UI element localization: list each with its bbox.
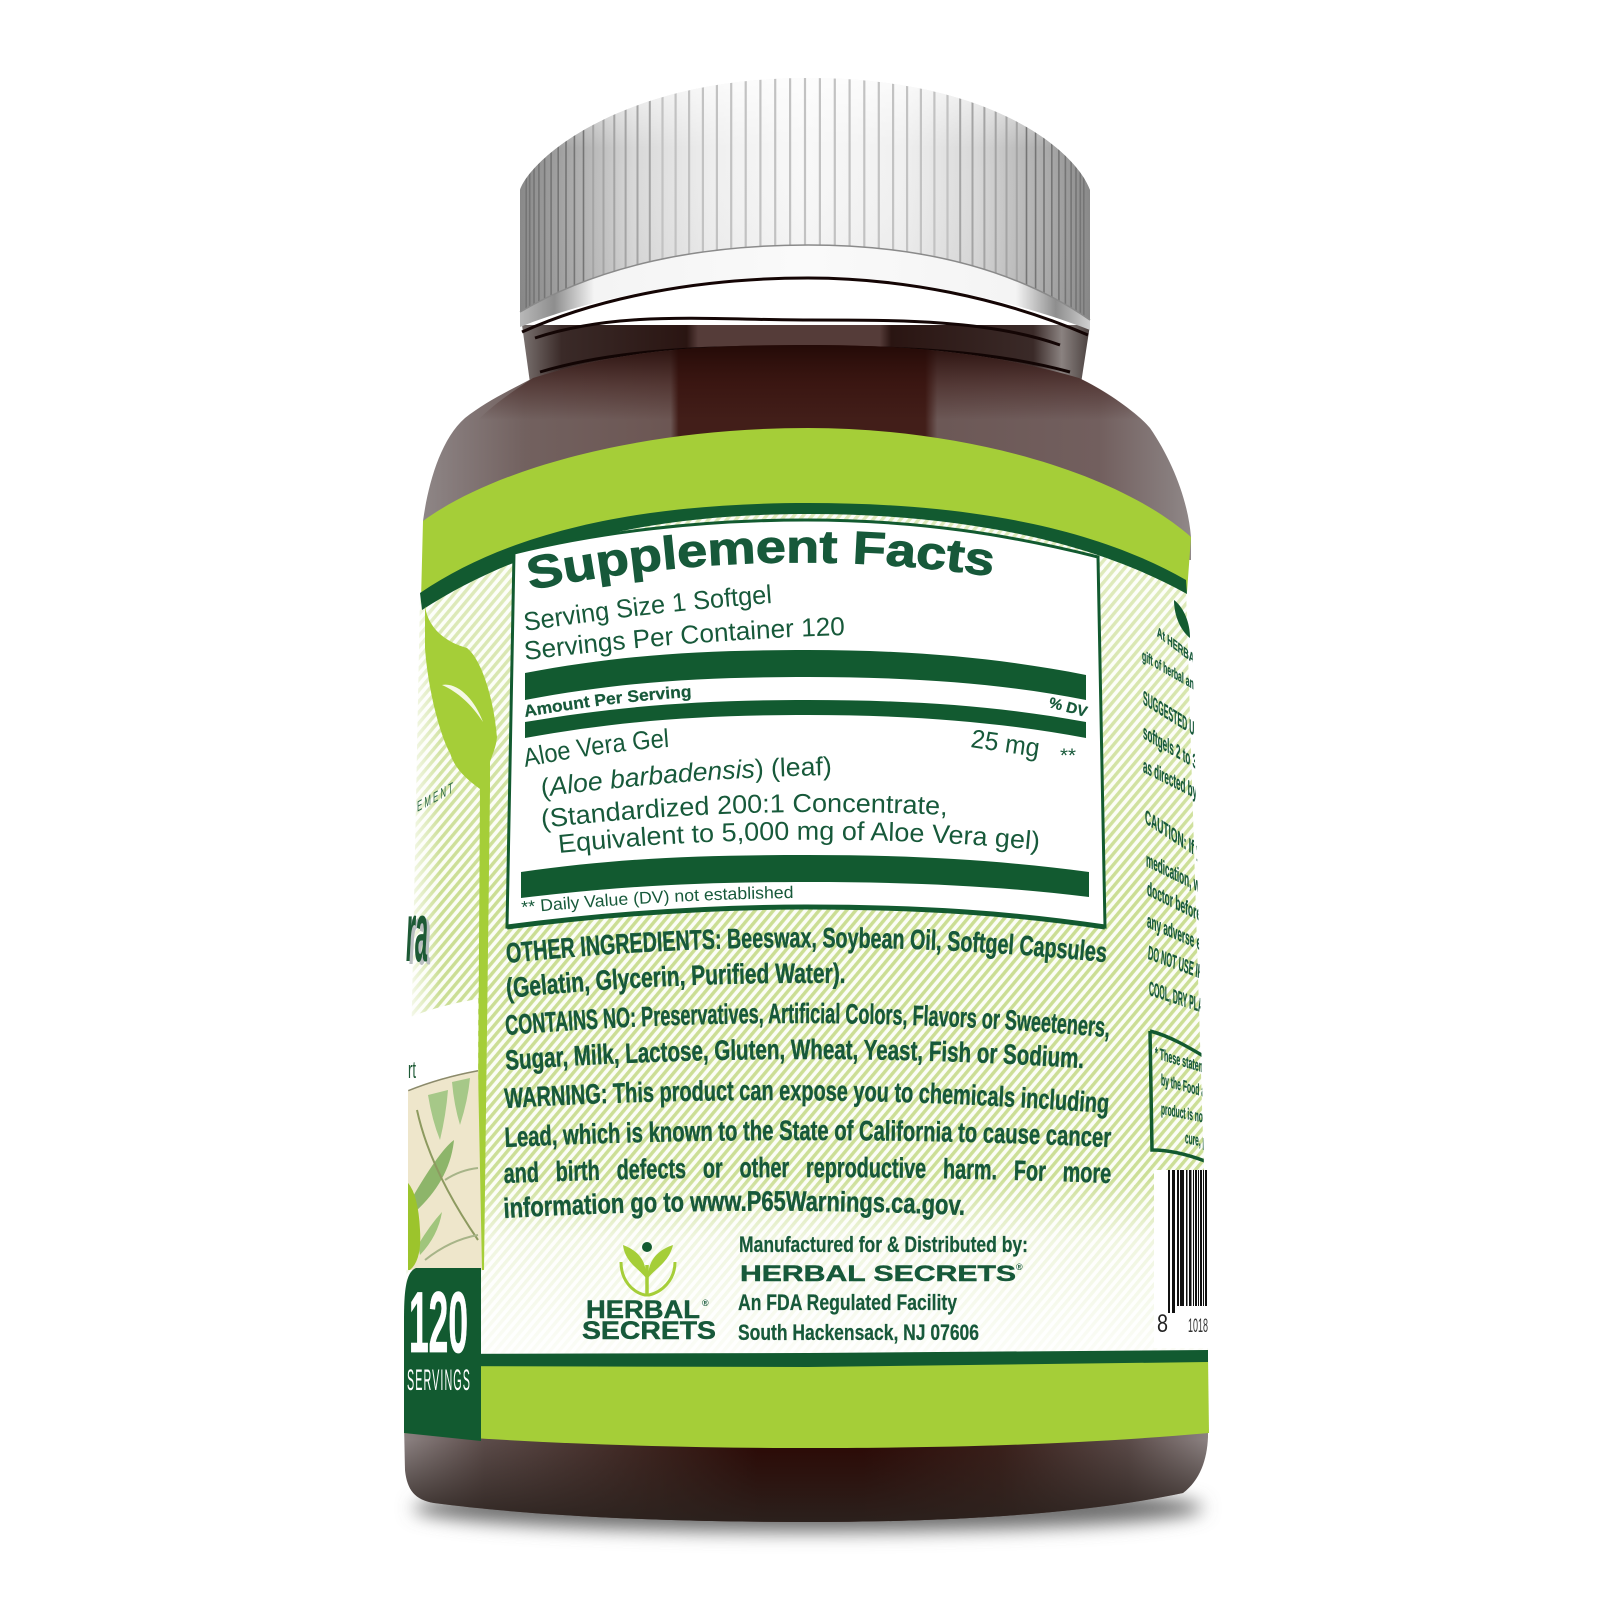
facility: An FDA Regulated Facility [738, 1290, 958, 1315]
lime bottom band [404, 1356, 1209, 1448]
bottle base [404, 1425, 1208, 1522]
text: CAUTION: If y [1145, 805, 1201, 864]
ingredient daily value: ** [1060, 746, 1077, 767]
ground shadow [413, 1484, 1203, 1532]
text: any adverse e [1147, 910, 1201, 955]
company name: HERBAL SECRETS [740, 1261, 1016, 1286]
front label fragment: ra [406, 885, 428, 979]
company name: ® [1016, 1262, 1023, 1272]
panel: supplement facts [505, 518, 1107, 930]
footnote: ** Daily Value (DV) not established [522, 886, 792, 912]
front label fragment: ra [409, 888, 431, 982]
label [400, 428, 1209, 1448]
text: SUGGESTED US [1143, 686, 1199, 743]
barcode digits [1157, 1310, 1208, 1338]
barcode [1154, 1170, 1208, 1348]
botanical photo [405, 1065, 485, 1270]
icon: small leaf [1174, 600, 1190, 638]
bottle neck [522, 318, 1090, 390]
other ingredients: (Gelatin, Glycerin, Purified Water). [507, 962, 844, 1004]
ingredient name: Aloe Vera Gel [525, 728, 668, 767]
top dark green arc [420, 503, 1187, 610]
text: cure, pr [1185, 1129, 1209, 1152]
strip text fragment: rt [408, 1057, 416, 1084]
standardization: (Standardized 200:1 Concentrate, [542, 794, 946, 833]
prop 65 warning: information go to www.P65Warnings.ca.gov. [504, 1190, 964, 1220]
right side wrapped text [1142, 600, 1210, 1163]
sprout leaf and stem [425, 606, 497, 1270]
logo wordmark: ® [702, 1298, 709, 1308]
other ingredients: OTHER INGREDIENTS: Beeswax, Soybean Oil, Softgel Capsules [506, 927, 1106, 963]
front label fragment: SERVINGS [407, 1364, 471, 1397]
text: doctor before [1147, 878, 1201, 926]
intro text [1142, 628, 1194, 690]
product name fragment [406, 916, 430, 965]
front label fragment [404, 606, 497, 1441]
text: 1018 [1188, 1316, 1208, 1337]
leaf highlight [442, 685, 483, 722]
front label fragment: 120 [409, 1275, 468, 1371]
caution [1145, 805, 1203, 1018]
contains no [506, 1002, 1109, 1074]
label hatched background [405, 510, 1208, 1354]
right side wrapped text: gift of herbal and [1142, 647, 1198, 696]
facts title: Supplement Facts [528, 531, 993, 588]
prop 65 warning: WARNING: This product can expose you to chemicals including [504, 1080, 1108, 1119]
white name strip [408, 999, 478, 1090]
icon: herbal secrets logo [621, 1242, 675, 1295]
footer: brand [582, 1232, 1028, 1345]
disclaimer box [1150, 1031, 1210, 1163]
serving size: Serving Size 1 Softgel [524, 584, 771, 630]
text: softgels 2 to 3 [1143, 719, 1197, 774]
intro text: At HERBAL [1157, 625, 1199, 671]
servings per container: Servings Per Container 120 [526, 617, 844, 660]
text: medication, w [1146, 849, 1200, 897]
product subtitle fragment: EMENT [417, 778, 455, 816]
thick rule 3 [521, 855, 1089, 898]
text: DO NOT USE IF [1148, 942, 1202, 984]
thick rule 2 [525, 700, 1086, 738]
percent daily value header: % DV [1050, 697, 1088, 716]
cap knurled ribs [515, 70, 1095, 330]
prop 65 warning: Lead, which is known to the State of California to cause cancer [505, 1120, 1112, 1150]
text: COOL, DRY PLA [1149, 977, 1203, 1018]
contains no: Sugar, Milk, Lactose, Gluten, Wheat, Yeast, Fish or Sodium. [506, 1038, 1083, 1074]
ingredient amount: 25 mg [971, 730, 1039, 762]
bottle cap [515, 70, 1095, 335]
logo wordmark: HERBAL [586, 1296, 700, 1324]
address: South Hackensack, NJ 07606 [738, 1320, 979, 1345]
prop 65 warning: and birth defects or other reproductive harm. For more [504, 1156, 1111, 1184]
other ingredients [506, 927, 1106, 1004]
bottom dark green band [404, 1350, 1208, 1367]
text: as directed by [1143, 755, 1197, 804]
barcode digits: 8 [1157, 1310, 1168, 1338]
botanical name: (Aloe barbadensis) (leaf) [542, 756, 830, 802]
suggested use [1143, 691, 1196, 802]
text: by the Food a [1161, 1071, 1205, 1101]
logo wordmark [582, 1296, 716, 1345]
amount per serving: Amount Per Serving [525, 686, 691, 718]
equivalence: Equivalent to 5,000 mg of Aloe Vera gel) [559, 821, 1038, 856]
thick rule 1 [525, 650, 1086, 700]
ingredients and warning text [504, 927, 1112, 1220]
servings box [404, 1268, 481, 1441]
prop 65 warning [504, 1080, 1112, 1220]
lime top band [421, 428, 1191, 600]
bottle shoulder [423, 345, 1191, 560]
logo wordmark: SECRETS [582, 1317, 716, 1345]
contains no: CONTAINS NO: Preservatives, Artificial Colors, Flavors or Sweeteners, [506, 1002, 1109, 1042]
manufactured for: Manufactured for & Distributed by: [739, 1232, 1028, 1257]
text: * These statem [1155, 1044, 1205, 1077]
text: product is not [1161, 1100, 1205, 1127]
